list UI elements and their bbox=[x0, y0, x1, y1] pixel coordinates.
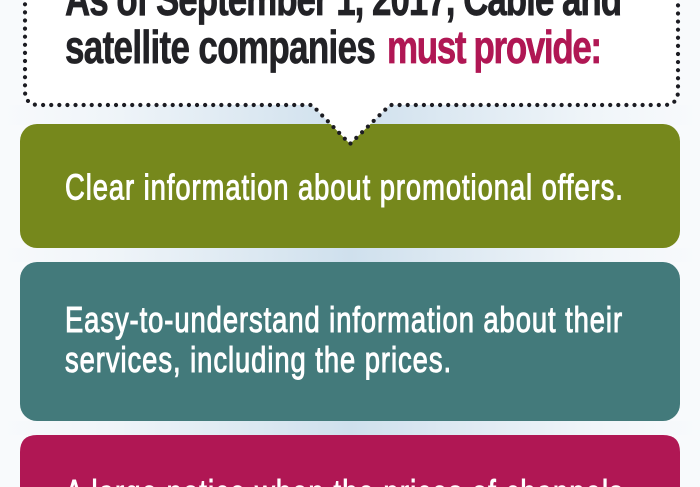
card: promotional offers: Clear information about promotional offers. bbox=[65, 167, 623, 207]
heading: satellite companies bbox=[65, 21, 376, 73]
speech bubble callout bbox=[25, 0, 678, 144]
card: promotional offers bbox=[20, 124, 680, 248]
heading bbox=[65, 0, 622, 73]
card: price notice, cut off at bottom bbox=[20, 435, 680, 487]
card: services and prices: Easy-to-understand information about their bbox=[65, 299, 622, 340]
card: services and prices bbox=[20, 262, 680, 421]
heading: must provide: bbox=[387, 21, 602, 73]
card: services and prices: services, including the prices. bbox=[65, 339, 451, 380]
